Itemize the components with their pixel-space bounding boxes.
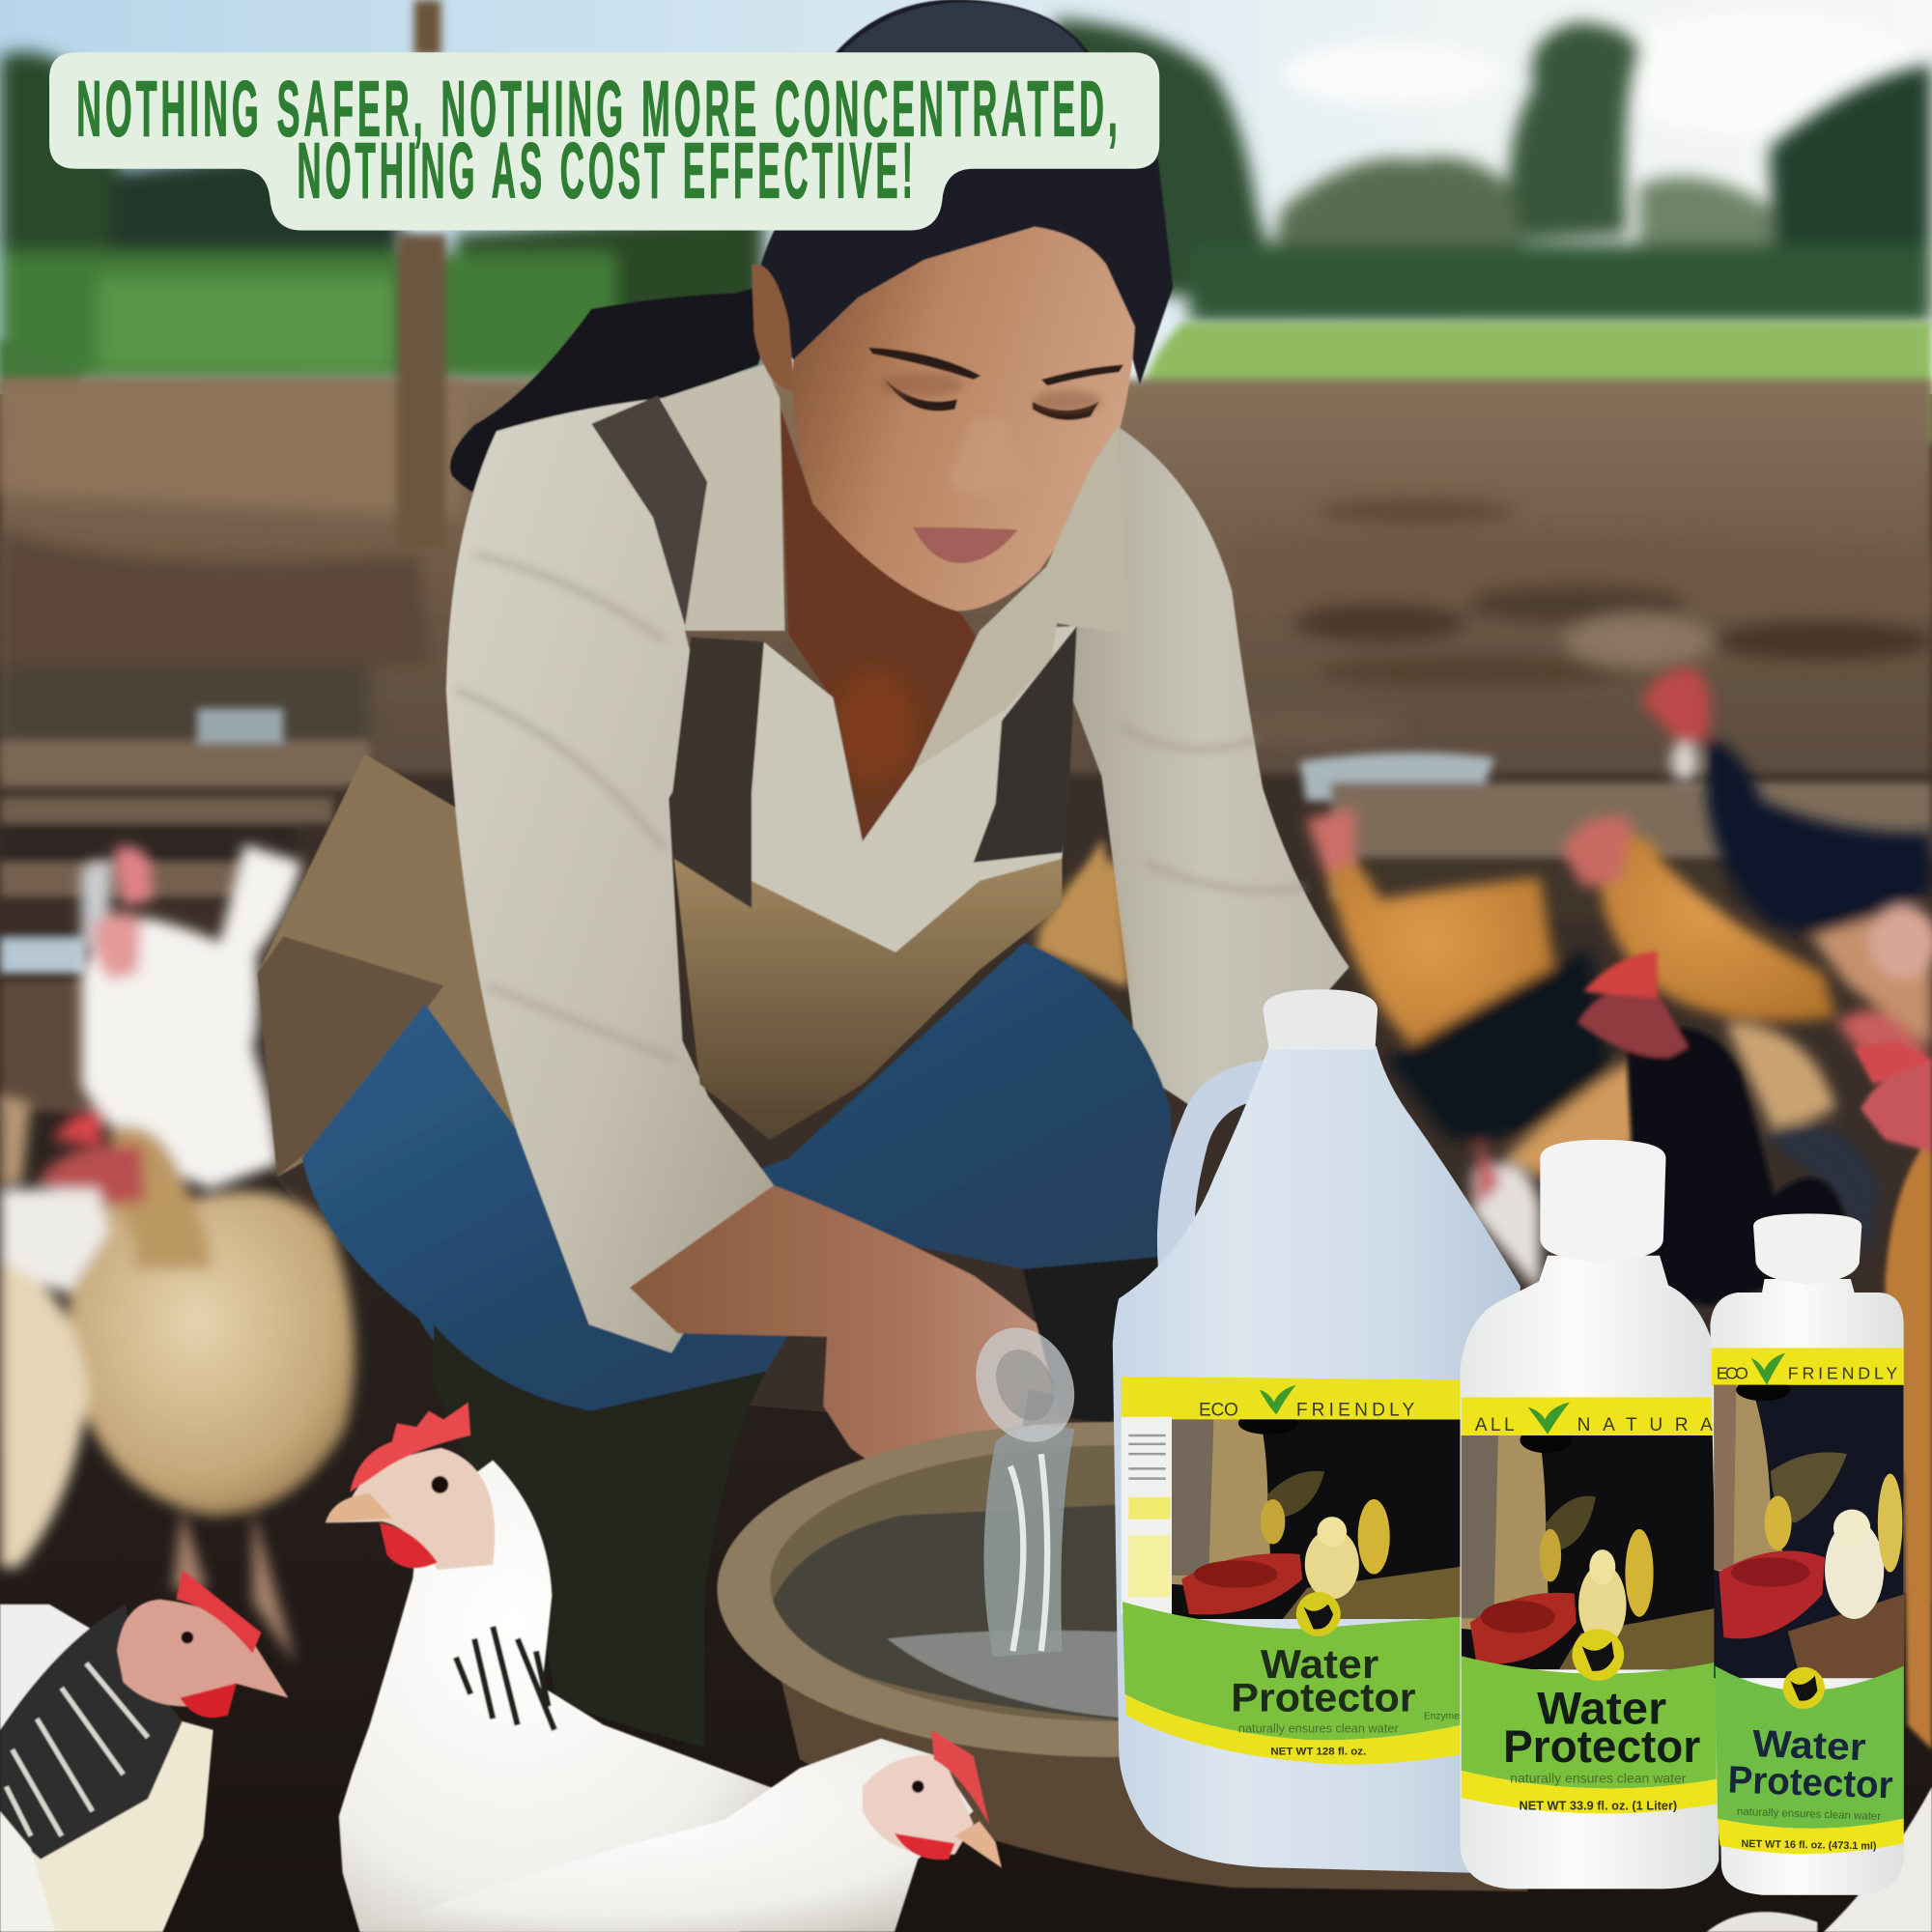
liter yellow lower band: [1462, 1771, 1717, 1813]
gallon badge: [1296, 1592, 1341, 1636]
apron straps: [591, 395, 707, 626]
gallon green label: [1122, 1602, 1462, 1740]
jeans: [301, 943, 1177, 1410]
gallon label text: Enzymes: [1424, 1711, 1464, 1721]
foreground hen, white centre: [326, 1403, 779, 1932]
gallon body: [1113, 1046, 1520, 1873]
liter yellow band: [1462, 1397, 1717, 1438]
gallon bottle: [1113, 989, 1520, 1873]
pint leaf logo: [1750, 1353, 1785, 1385]
one liter bottle: [1460, 1140, 1719, 1889]
gallon cap: [1263, 989, 1378, 1050]
pint yellow lower band: [1718, 1819, 1904, 1854]
orange hen, upper: [1600, 835, 1836, 1022]
gallon label text: naturally ensures clean water: [1238, 1720, 1399, 1735]
gallon label text: FRIENDLY: [1296, 1401, 1415, 1421]
banner headline: [76, 65, 1122, 215]
right collar: [913, 426, 1130, 770]
orange hen, left: [1324, 856, 1555, 1069]
mouth and nose: [913, 527, 1018, 563]
pint label text: naturally ensures clean water: [1737, 1806, 1881, 1823]
ear: [752, 265, 795, 392]
pint label text: Protector: [1727, 1758, 1893, 1806]
water basin: [717, 1422, 1528, 1891]
neck: [780, 407, 985, 841]
liter label text: naturally ensures clean water: [1510, 1771, 1687, 1786]
gallon handle: [1157, 1060, 1269, 1269]
pint label text: NET WT 16 fl. oz. (473.1 ml): [1741, 1838, 1877, 1852]
liter body: [1460, 1256, 1719, 1889]
foreground hen fragments, bottom right: [1707, 1786, 1932, 1932]
banner headline: NOTHING AS COST EFFECTIVE!: [297, 128, 917, 215]
tan hen visible under sleeve: [1035, 838, 1127, 985]
headline banner: [49, 52, 1159, 231]
liter label text: Protector: [1503, 1721, 1700, 1773]
gallon yellow lower band: [1125, 1694, 1462, 1765]
right sleeve: [1060, 426, 1350, 1122]
eye shadow: [880, 372, 1101, 412]
pint label text: ECO: [1717, 1363, 1748, 1382]
water stream and cup: [957, 1312, 1093, 1658]
foreground hen, white right: [359, 1730, 1002, 1932]
midground blurred hens, right side: [1035, 668, 1932, 1293]
liter cap: [1540, 1140, 1665, 1262]
apron left side: [258, 754, 690, 1233]
gallon label text: [1199, 1401, 1464, 1757]
sleeve folds: [456, 554, 1306, 1060]
gallon side panel: [1122, 1417, 1172, 1614]
left arm sleeve: [446, 398, 774, 1353]
left side hens, soft: [0, 844, 355, 1663]
small white hen behind bottles: [1472, 1163, 1540, 1293]
right boot: [1023, 1257, 1158, 1423]
pint label text: [1717, 1363, 1897, 1852]
liter label text: Water: [1537, 1683, 1666, 1734]
liter leaf logo: [1528, 1403, 1570, 1435]
orange hen, right edge: [1855, 1041, 1932, 1749]
pint yellow band: [1712, 1348, 1904, 1386]
liter green label: [1462, 1656, 1717, 1788]
face: [793, 227, 1135, 611]
pint label text: Water: [1751, 1722, 1866, 1769]
liter label text: NATURA: [1577, 1415, 1713, 1435]
sixteen ounce bottle: [1710, 1213, 1904, 1895]
pint label text: FRIENDLY: [1788, 1363, 1897, 1382]
buff hen, left: [37, 1109, 355, 1663]
liter label text: [1475, 1415, 1713, 1813]
black hen beside bottles: [1577, 952, 1844, 1306]
pint cap: [1753, 1213, 1861, 1284]
gallon label text: Water: [1261, 1641, 1378, 1687]
gallon leaf logo: [1260, 1385, 1296, 1414]
pint body: [1710, 1279, 1904, 1895]
torso shirt: [741, 626, 1077, 952]
foreground hen, barred left: [0, 1570, 288, 1932]
left boot: [434, 1324, 766, 1747]
brows and eyes: [868, 348, 1123, 420]
gallon yellow band: [1122, 1377, 1462, 1421]
gallon label text: ECO: [1199, 1401, 1238, 1421]
ponytail: [450, 277, 788, 497]
gallon label text: NET WT 128 fl. oz.: [1270, 1746, 1366, 1757]
hair: [754, 0, 1173, 384]
liter badge: [1573, 1629, 1624, 1681]
apron bib: [674, 859, 1062, 1140]
liter label text: NET WT 33.9 fl. oz. (1 Liter): [1520, 1799, 1677, 1813]
gallon product photo: [1172, 1412, 1462, 1619]
white hen, rear left: [81, 844, 301, 1189]
left collar: [663, 365, 784, 631]
pint badge: [1783, 1667, 1825, 1709]
liter product photo: [1462, 1427, 1717, 1669]
pint green label: [1716, 1665, 1904, 1829]
woman farmer pouring water: [258, 0, 1350, 1747]
gallon label text: Protector: [1231, 1675, 1416, 1720]
dark hen, low: [1386, 949, 1614, 1140]
liter label text: ALL: [1475, 1415, 1515, 1435]
black hen, top right: [1641, 668, 1932, 932]
forearm and hand: [630, 1185, 1096, 1485]
banner shape: [49, 52, 1159, 231]
pint product photo: [1714, 1378, 1904, 1678]
